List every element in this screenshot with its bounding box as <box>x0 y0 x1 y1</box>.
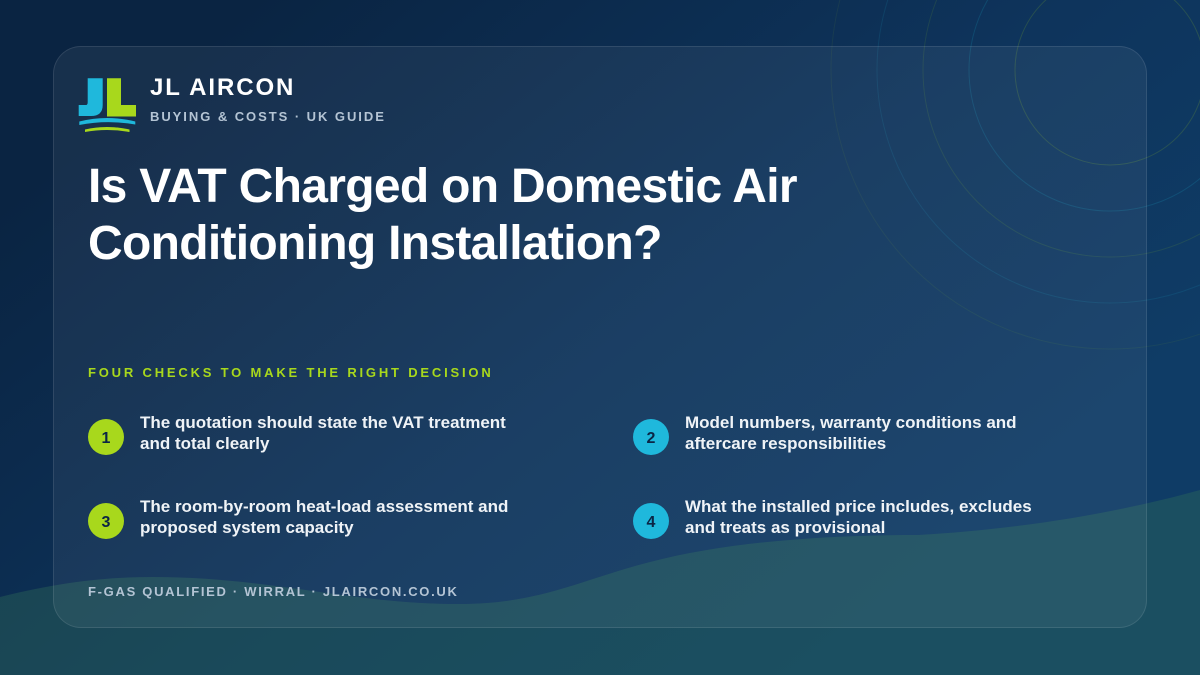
section heading: FOUR CHECKS TO MAKE THE RIGHT DECISION <box>88 365 494 380</box>
logo icon <box>78 78 136 132</box>
text 3 <box>140 497 508 537</box>
check item 3 <box>88 497 508 539</box>
text 1: and total clearly <box>140 434 269 453</box>
check item 1 <box>88 413 506 455</box>
text 3: proposed system capacity <box>140 518 354 537</box>
badge 4: 4 <box>647 514 655 531</box>
card panel <box>53 46 1147 628</box>
footer text: F-GAS QUALIFIED · WIRRAL · JLAIRCON.CO.UK <box>88 584 459 599</box>
text 1 <box>140 413 506 453</box>
brand name: JL AIRCON <box>150 74 295 101</box>
text 4: What the installed price includes, excludes <box>685 497 1032 516</box>
badge 4 <box>633 503 669 539</box>
badge 2: 2 <box>647 430 655 447</box>
badge 2 <box>633 419 669 455</box>
badge 3 <box>88 503 124 539</box>
title: Conditioning Installation? <box>88 217 662 270</box>
badge 1 <box>88 419 124 455</box>
check item 4 <box>633 497 1032 539</box>
badge 3: 3 <box>102 514 110 531</box>
check item 2 <box>633 413 1017 455</box>
text 4 <box>685 497 1032 537</box>
text 2 <box>685 413 1017 453</box>
text 3: The room-by-room heat-load assessment and <box>140 497 508 516</box>
title <box>88 160 797 270</box>
text 1: The quotation should state the VAT treatment <box>140 413 506 432</box>
badge 1: 1 <box>102 430 110 447</box>
brand subtitle: BUYING & COSTS · UK GUIDE <box>150 109 386 124</box>
title: Is VAT Charged on Domestic Air <box>88 160 797 213</box>
text 4: and treats as provisional <box>685 518 885 537</box>
text 2: aftercare responsibilities <box>685 434 886 453</box>
text 2: Model numbers, warranty conditions and <box>685 413 1017 432</box>
